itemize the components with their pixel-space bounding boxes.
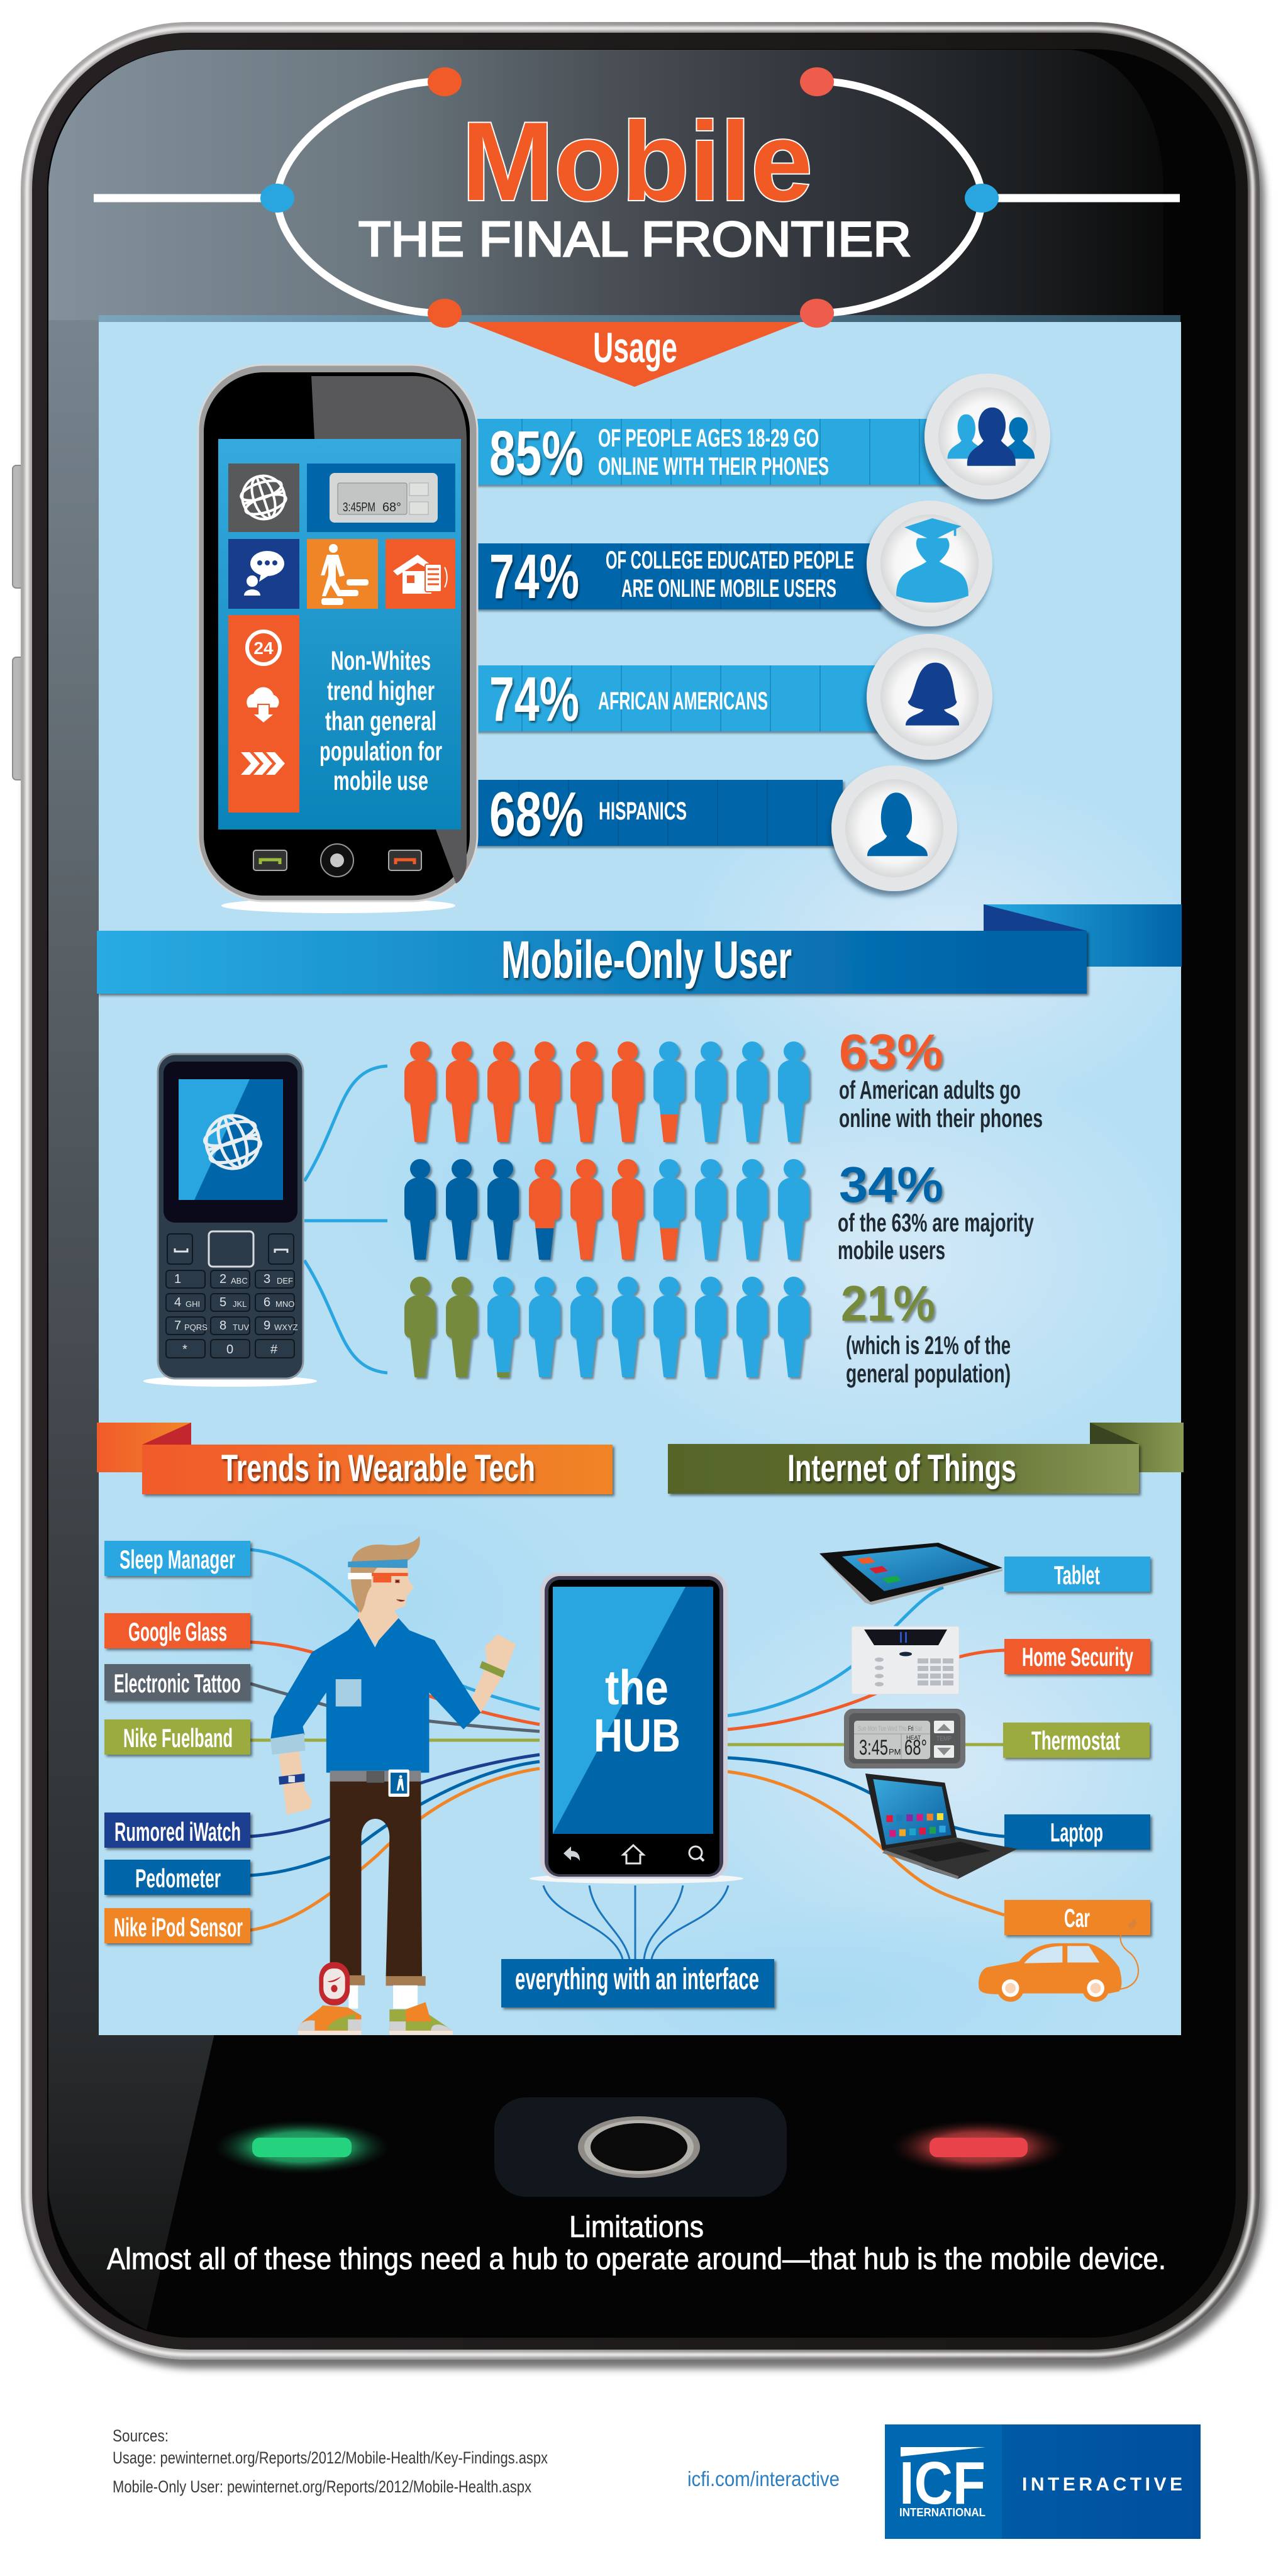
connector lines from feature phone	[304, 1066, 387, 1373]
feature phone key labels: 4	[174, 1296, 181, 1309]
left glare on phone	[48, 314, 214, 2330]
label: rumored iwatch	[104, 1813, 250, 1848]
feature phone key labels: 1	[174, 1272, 181, 1286]
banner: internet of things	[668, 1423, 1184, 1494]
feature phone key labels: WXYZ	[274, 1323, 298, 1332]
icon: laptop	[865, 1774, 1017, 1879]
icon: thermostat	[844, 1709, 965, 1768]
feature phone	[143, 1054, 317, 1387]
right forearm	[470, 1635, 516, 1713]
usage heading: Usage	[593, 324, 677, 372]
sources	[113, 2426, 548, 2496]
label: nike ipod sensor: Nike iPod Sensor	[114, 1913, 243, 1942]
label: thermostat: Thermostat	[1031, 1726, 1120, 1755]
label: nike ipod sensor	[104, 1908, 250, 1943]
shirt cuff	[270, 1733, 306, 1755]
wearable labels	[104, 1541, 250, 1943]
label: car	[1004, 1900, 1150, 1935]
stat: 21%: general population)	[846, 1359, 1011, 1388]
row 2 people	[404, 1159, 809, 1260]
icon: woman circle	[867, 634, 992, 760]
feature phone key labels	[174, 1272, 298, 1357]
sources: Usage: pewinternet.org/Reports/2012/Mobile-Health/Key-Findings.aspx	[113, 2448, 548, 2467]
hub text	[594, 1660, 680, 1762]
thing labels	[1003, 1557, 1150, 1935]
icon: thermostat: TEMP	[936, 1735, 952, 1743]
shirt	[270, 1618, 481, 1773]
olive wristband	[481, 1664, 504, 1674]
feature phone key labels: *	[182, 1343, 187, 1357]
tile: thermostat: 3:45PM	[343, 501, 375, 514]
stat: 21%	[841, 1275, 1011, 1388]
row 3 people	[404, 1277, 809, 1377]
banner: mobile-only user: Mobile-Only User	[501, 930, 792, 989]
limitations text: Almost all of these things need a hub to operate around—that hub is the mobile device.	[107, 2243, 1166, 2276]
pedometer tile	[389, 1770, 409, 1797]
limitations text: Limitations	[569, 2211, 704, 2244]
feature phone key labels: GHI	[186, 1299, 200, 1309]
neck	[357, 1604, 401, 1646]
ICF logo	[885, 2424, 1201, 2539]
icon: thermostat: PM	[889, 1747, 901, 1757]
feature phone key labels: ABC	[231, 1276, 248, 1285]
belt	[330, 1770, 421, 1783]
feature phone screen	[179, 1079, 283, 1200]
label: home security: Home Security	[1022, 1642, 1133, 1672]
everything with an interface box: everything with an interface	[515, 1963, 759, 1996]
icon: thermostat: 68°	[904, 1736, 927, 1760]
people chart	[404, 1041, 809, 1377]
feature phone key labels: 8	[219, 1319, 226, 1333]
face	[362, 1564, 414, 1612]
label: rumored iwatch: Rumored iWatch	[114, 1817, 241, 1846]
tile: chat	[228, 539, 299, 609]
phone screen text: trend higher	[327, 676, 435, 706]
phone screen text: than general	[325, 706, 436, 736]
icon: thermostat: HEAT	[906, 1735, 921, 1741]
feature phone key labels: PQRS	[184, 1323, 208, 1332]
label: sleep manager	[104, 1541, 250, 1576]
feature phone key labels: TUV	[233, 1323, 249, 1332]
icon: group circle	[924, 374, 1050, 499]
hair	[351, 1536, 420, 1613]
bottom green button	[214, 2120, 390, 2174]
feature phone key labels: 9	[264, 1319, 270, 1333]
ICF logo: INTERACTIVE	[1022, 2474, 1182, 2495]
trousers	[330, 1780, 422, 1977]
trouser cuffs	[348, 1975, 426, 1985]
shoes	[297, 2002, 453, 2035]
hub text: HUB	[594, 1709, 680, 1762]
man figure	[270, 1536, 516, 2035]
connector lines: hub to things	[728, 1587, 1004, 1915]
hub lines to interface box	[543, 1885, 728, 1959]
label: electronic tattoo	[104, 1664, 250, 1701]
bar 74% college: ARE ONLINE MOBILE USERS	[621, 575, 836, 602]
connector lines: wearables to hub	[250, 1550, 540, 1930]
tile: orange column: 24	[253, 638, 274, 658]
bar 74% african americans	[472, 664, 880, 735]
feature phone key labels: 7	[174, 1319, 181, 1333]
feature phone key labels: MNO	[275, 1299, 294, 1309]
stat: 21%: (which is 21% of the	[846, 1331, 1011, 1360]
tile: globe	[228, 464, 299, 532]
phone screen	[218, 439, 461, 830]
hub phone	[530, 1573, 743, 1884]
feature phone key labels: 5	[219, 1296, 226, 1309]
stat: 21%: 21%	[841, 1275, 935, 1331]
website link text: icfi.com/interactive	[687, 2467, 840, 2490]
stat: 63%: online with their phones	[839, 1104, 1043, 1133]
tile: orange column	[228, 615, 299, 813]
hub nav icons	[564, 1845, 704, 1863]
everything with an interface box	[501, 1959, 774, 2007]
label: google glass: Google Glass	[128, 1617, 227, 1646]
feature phone key labels: #	[270, 1343, 278, 1357]
header gradient screen	[48, 50, 1163, 320]
feature phone key labels: 2	[219, 1272, 226, 1286]
row 1 people	[404, 1041, 809, 1142]
banner: mobile-only user	[97, 904, 1182, 994]
icon: thermostat: 3:45	[859, 1736, 888, 1760]
bar 85%: OF PEOPLE AGES 18-29 GO	[598, 425, 819, 452]
bottom red button	[891, 2120, 1067, 2174]
sources: Mobile-Only User: pewinternet.org/Reports/2012/Mobile-Health.aspx	[113, 2477, 531, 2496]
left forearm	[279, 1751, 312, 1815]
bar 85%	[472, 418, 950, 489]
title: Mobile	[462, 99, 813, 224]
main light-blue panel	[99, 315, 1208, 2101]
limitations text	[107, 2211, 1166, 2276]
bar 74% college: OF COLLEGE EDUCATED PEOPLE	[606, 547, 854, 574]
phone screen text: mobile use	[333, 766, 428, 796]
phone screen text	[319, 646, 442, 796]
headband	[348, 1559, 408, 1568]
google glass	[348, 1573, 408, 1582]
icon: car	[979, 1919, 1138, 2002]
phone screen text: population for	[319, 736, 442, 767]
stat: 63%	[839, 1024, 1043, 1133]
bar 68%: 68%	[489, 779, 584, 850]
feature phone key labels: 0	[226, 1343, 233, 1357]
watch	[279, 1774, 304, 1785]
nike ipod sensor	[319, 1962, 350, 2006]
bar 74% african americans: AFRICAN AMERICANS	[598, 687, 768, 715]
stat: 34%: mobile users	[838, 1236, 945, 1265]
socks	[348, 1985, 418, 2009]
title ring	[94, 67, 1180, 328]
label: tablet: Tablet	[1054, 1560, 1100, 1590]
label: tablet	[1004, 1557, 1150, 1592]
stat: 63%: 63%	[839, 1024, 943, 1080]
icon: thermostat: Sun Mon Tue Wed Thu Fri Sat	[858, 1725, 922, 1733]
label: nike fuelband	[104, 1719, 250, 1755]
tile: stairs	[307, 539, 378, 609]
eye and mouth	[396, 1580, 404, 1601]
icon: tablet	[819, 1543, 1002, 1605]
banner: wearable tech	[97, 1423, 613, 1494]
title: THE FINAL FRONTIER	[358, 211, 911, 267]
ICF logo: ICF	[899, 2450, 985, 2517]
phone bottom buttons	[253, 844, 421, 877]
ICF logo: INTERNATIONAL	[899, 2506, 985, 2519]
label: car: Car	[1064, 1903, 1090, 1933]
bottom home button	[494, 2097, 787, 2197]
label: electronic tattoo: Electronic Tattoo	[114, 1668, 241, 1698]
usage heading	[468, 322, 801, 387]
icon: home security panel	[852, 1626, 959, 1694]
feature phone key labels: 3	[264, 1272, 270, 1286]
feature phone key labels: 6	[264, 1296, 270, 1309]
label: sleep manager: Sleep Manager	[119, 1545, 235, 1574]
label: pedometer	[104, 1860, 250, 1895]
icon: man circle	[831, 765, 957, 891]
label: home security	[1004, 1639, 1150, 1674]
phone side buttons	[13, 465, 24, 780]
title	[358, 99, 911, 267]
hub screen	[553, 1587, 713, 1834]
label: thermostat	[1003, 1723, 1150, 1758]
sources: Sources:	[113, 2426, 169, 2445]
phone screen text: Non-Whites	[331, 646, 431, 676]
smartphone with tiles	[198, 365, 477, 913]
banner: internet of things: Internet of Things	[787, 1447, 1016, 1489]
shirt pocket	[336, 1679, 362, 1706]
label: pedometer: Pedometer	[135, 1863, 221, 1893]
label: nike fuelband: Nike Fuelband	[123, 1723, 233, 1753]
bar 85%: ONLINE WITH THEIR PHONES	[598, 453, 829, 480]
label: laptop: Laptop	[1050, 1818, 1103, 1847]
icon: graduate circle	[867, 501, 992, 626]
label: laptop	[1004, 1814, 1150, 1850]
bar 74% college	[472, 541, 880, 612]
tile: thermostat	[307, 464, 455, 532]
bar 85%: 85%	[489, 418, 584, 489]
stat: 63%: of American adults go	[839, 1075, 1021, 1104]
stat bars	[472, 418, 950, 850]
bar 74% african americans: 74%	[489, 664, 579, 735]
tile: smart home	[386, 539, 455, 609]
banner: wearable tech: Trends in Wearable Tech	[221, 1447, 535, 1489]
hub text: the	[605, 1660, 669, 1715]
feature phone key labels: DEF	[277, 1276, 293, 1285]
feature phone keys	[166, 1231, 294, 1358]
stat: 34%: 34%	[839, 1157, 943, 1213]
bar 68%: HISPANICS	[599, 797, 687, 825]
tile: thermostat: 68°	[382, 501, 401, 514]
label: google glass	[104, 1613, 250, 1648]
feature phone key labels: JKL	[233, 1299, 247, 1309]
bar 68%	[472, 779, 843, 850]
stat: 34%: of the 63% are majority	[838, 1208, 1034, 1237]
bar 74% college: 74%	[489, 541, 579, 612]
stat: 34%	[838, 1157, 1034, 1265]
